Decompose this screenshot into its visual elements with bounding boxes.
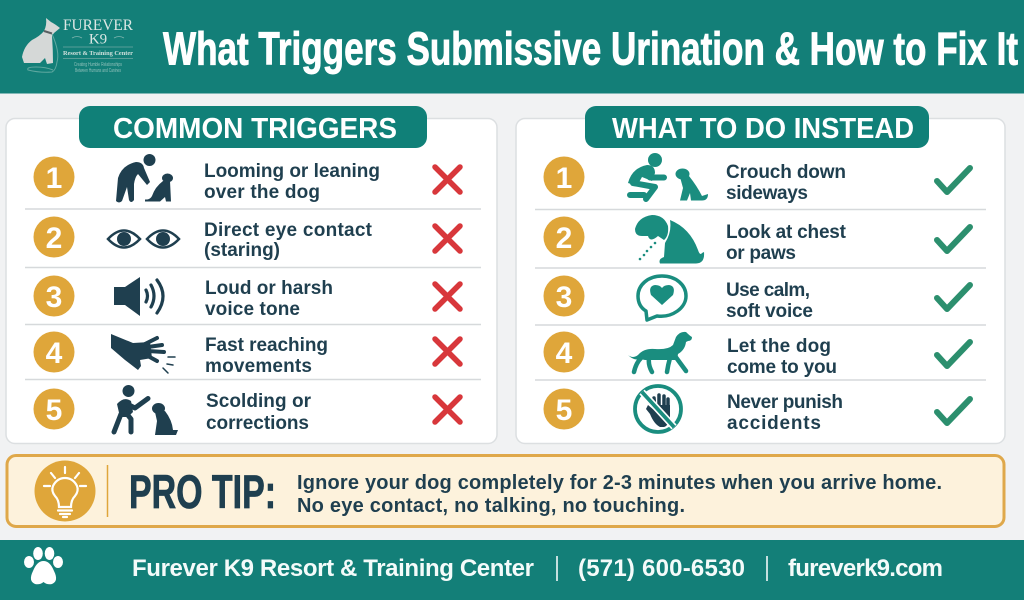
logo tagline: Creating Humble Relationships xyxy=(74,62,122,68)
logo name: FUREVER xyxy=(63,17,133,34)
row 1: 1 xyxy=(46,162,62,195)
row 2: 2 xyxy=(556,222,572,255)
row 4 xyxy=(544,332,970,378)
text: calm voice xyxy=(726,280,813,322)
text: dog comes to you xyxy=(727,336,837,378)
icon: green check xyxy=(937,342,970,366)
icon: logo dog xyxy=(22,18,60,72)
text: eye contact: Direct eye contact xyxy=(204,220,373,241)
text: never punish: Never punish xyxy=(727,392,843,413)
row 1 xyxy=(34,154,460,203)
text: never punish xyxy=(727,392,843,434)
icon: person scolding dog xyxy=(114,385,178,435)
footer website: fureverk9.com xyxy=(788,555,943,582)
text: chest or paws: Look at chest xyxy=(726,222,847,243)
icon: red x xyxy=(435,284,460,309)
text: dog comes to you: come to you xyxy=(727,357,837,378)
row 5 xyxy=(34,385,460,435)
header band xyxy=(0,0,1024,94)
icon: fast reaching hand xyxy=(111,334,175,373)
logo xyxy=(22,17,133,74)
row 2: 2 xyxy=(46,222,62,255)
text: never punish: accidents xyxy=(727,413,821,434)
icon: staring eyes xyxy=(108,230,179,248)
icon: light bulb xyxy=(34,460,96,522)
text: scolding xyxy=(206,391,312,434)
footer name: Furever K9 Resort & Training Center xyxy=(132,555,534,582)
pro tip text: No eye contact, no talking, no touching. xyxy=(297,495,685,517)
text: crouch: Crouch down xyxy=(726,162,846,183)
text: chest or paws xyxy=(726,222,847,264)
row 4 xyxy=(34,332,460,377)
icon: no punish hand xyxy=(635,386,681,432)
text: chest or paws: or paws xyxy=(726,243,796,264)
row 1: 1 xyxy=(556,162,572,195)
text: fast reaching: movements xyxy=(205,356,312,377)
text: loud voice xyxy=(205,278,333,320)
text: scolding: corrections xyxy=(206,413,309,434)
row 4: 4 xyxy=(556,337,573,370)
text: looming: Looming or leaning xyxy=(204,161,380,182)
logo tagline two: Between Humans and Canines xyxy=(75,68,121,74)
icon: dog looking down xyxy=(635,215,704,264)
text: loud voice: voice tone xyxy=(205,299,300,320)
icon: red x xyxy=(435,167,460,192)
row 3 xyxy=(34,276,460,320)
row 5: 5 xyxy=(556,394,572,427)
icon: red x xyxy=(435,226,460,251)
pro tip text xyxy=(297,472,942,517)
heading: what to do instead: WHAT TO DO INSTEAD xyxy=(612,113,914,145)
footer phone: (571) 600-6530 xyxy=(578,555,745,582)
row 3: 3 xyxy=(46,281,62,314)
icon: green check xyxy=(937,168,970,192)
panel: common triggers xyxy=(6,106,497,444)
icon: person looming over dog xyxy=(116,154,173,202)
text: crouch: sideways xyxy=(726,183,808,204)
heading: what to do instead xyxy=(585,106,929,148)
text: eye contact xyxy=(204,220,373,261)
text: eye contact: (staring) xyxy=(204,240,280,261)
icon: person crouching beside dog xyxy=(628,153,708,200)
pro tip text: Ignore your dog completely for 2-3 minutes when you arrive home. xyxy=(297,472,942,494)
text: crouch xyxy=(726,162,846,204)
heading: common triggers xyxy=(79,106,427,148)
icon: red x xyxy=(435,339,460,364)
row 2 xyxy=(544,215,970,264)
row 4: 4 xyxy=(46,337,63,370)
icon: heart speech bubble xyxy=(638,276,686,320)
text: looming: over the dog xyxy=(204,182,320,203)
row 3 xyxy=(544,276,970,322)
pro tip label: PRO TIP: xyxy=(129,465,276,518)
text: dog comes to you: Let the dog xyxy=(727,336,831,357)
row 2 xyxy=(34,216,460,261)
row 3: 3 xyxy=(556,281,572,314)
icon: green check xyxy=(937,227,970,251)
heading: common triggers: COMMON TRIGGERS xyxy=(113,113,397,145)
text: scolding: Scolding or xyxy=(206,391,312,412)
icon: red x xyxy=(435,397,460,422)
text: fast reaching xyxy=(205,335,328,377)
icon: paw xyxy=(24,547,63,584)
text: looming xyxy=(204,161,380,203)
text: calm voice: Use calm, xyxy=(726,280,810,301)
footer band xyxy=(0,540,1024,600)
row 5: 5 xyxy=(46,394,62,427)
icon: green check xyxy=(937,399,970,423)
text: loud voice: Loud or harsh xyxy=(205,278,333,299)
row 5 xyxy=(544,386,970,434)
callout: pro tip xyxy=(7,456,1004,526)
row 1 xyxy=(544,153,970,204)
text: calm voice: soft voice xyxy=(726,301,813,322)
icon: walking dog xyxy=(628,332,692,372)
logo subtitle: Resort & Training Center xyxy=(63,50,133,57)
panel: what to do instead xyxy=(516,106,1005,444)
text: fast reaching: Fast reaching xyxy=(205,335,328,356)
logo k9: K9 xyxy=(89,32,107,48)
icon: loud speaker xyxy=(114,277,163,316)
icon: green check xyxy=(937,285,970,309)
